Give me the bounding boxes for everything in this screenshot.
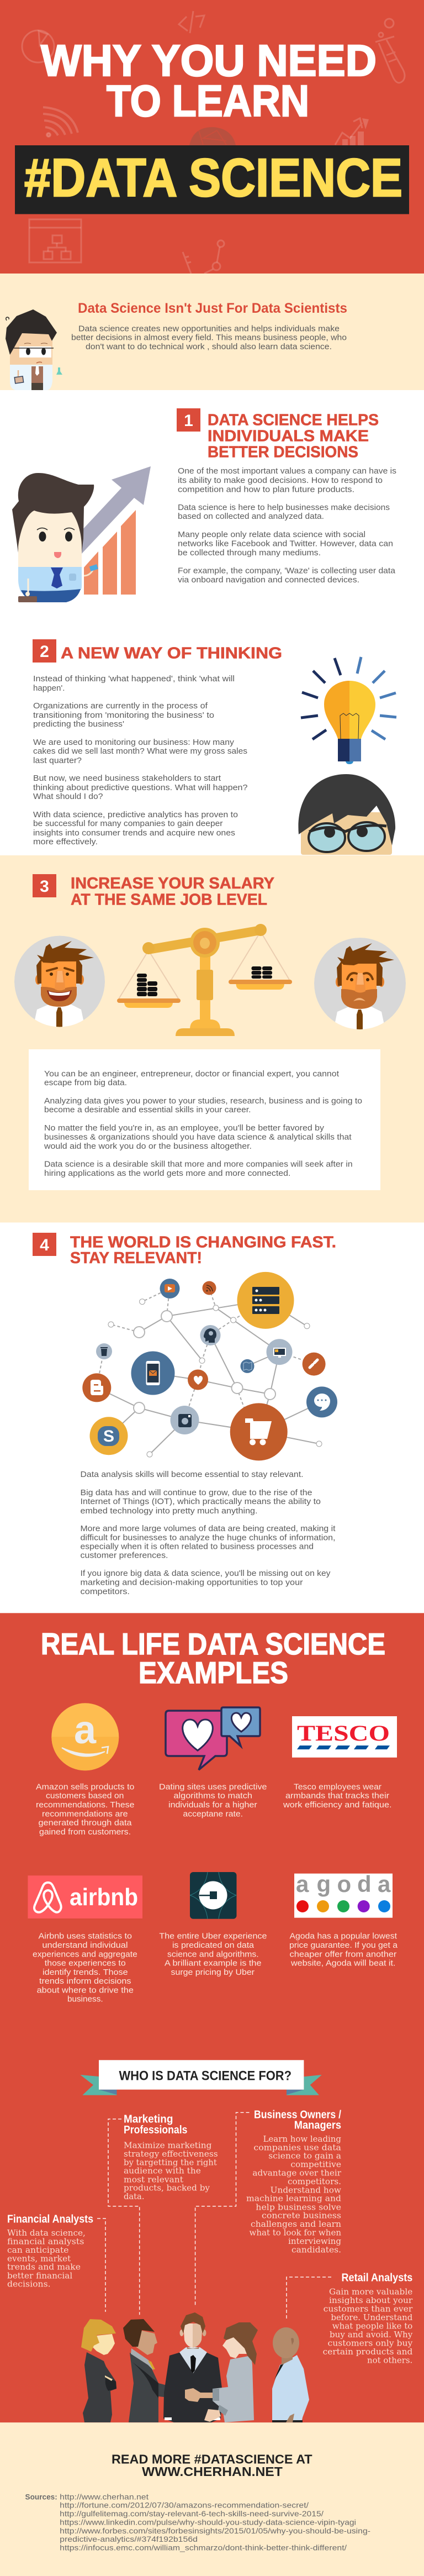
node: map bbox=[241, 1359, 254, 1373]
audience: financial analysts bbox=[7, 2214, 93, 2289]
panel: real life examples bbox=[0, 1613, 424, 2422]
illustration: balance scale with coins bbox=[117, 924, 292, 1036]
node: shopping cart bbox=[230, 1403, 288, 1460]
caption: tesco bbox=[283, 1782, 392, 1810]
logo: airbnb bbox=[28, 1875, 142, 1918]
heading: increase your salary: AT THE SAME JOB LEVEL bbox=[71, 891, 267, 909]
card: salary text: hiring applications as the world gets more and more connected. bbox=[44, 1169, 290, 1178]
number badge 2: 2 bbox=[40, 643, 49, 661]
heading: the world is changing fast: STAY RELEVANT! bbox=[70, 1249, 202, 1267]
intro text: don't want to do technical work , should also learn data science. bbox=[86, 342, 332, 351]
text block: new way of thinking: be successful for many companies to gain deeper bbox=[33, 819, 223, 828]
text block: stay relevant: difficult for businesses to analyze the huge chunks of information, bbox=[81, 1533, 336, 1543]
number badge 3: 3 bbox=[40, 877, 49, 896]
node: instagram bbox=[170, 1406, 199, 1434]
illustration: sad man bbox=[314, 938, 406, 1030]
caption: tesco: armbands that tracks their bbox=[285, 1791, 389, 1801]
heading: real life data science examples: REAL LIFE DATA SCIENCE bbox=[41, 1627, 385, 1661]
node: head with gear bbox=[200, 1325, 221, 1345]
caption: agoda: price guarantee. If you get a bbox=[289, 1941, 398, 1950]
audience: marketing professionals bbox=[124, 2114, 218, 2201]
icon: scientist character bbox=[6, 309, 62, 390]
heading: a new way of thinking: A NEW WAY OF THINKING bbox=[61, 645, 282, 663]
call to action: read more bbox=[112, 2452, 312, 2479]
intro text: better decisions in almost every field. This means business people, who bbox=[71, 333, 347, 343]
text block: new way of thinking: We are used to monitoring our business: How many bbox=[33, 738, 235, 747]
text block: better decisions: via onboard navigation and connected devices. bbox=[178, 575, 359, 585]
caption: dating sites: Dating sites uses predictive bbox=[159, 1782, 267, 1791]
audience: business owners and managers: Learn how leading bbox=[263, 2134, 341, 2144]
person: centre man bbox=[163, 2312, 222, 2422]
caption: uber: surge pricing by Uber bbox=[171, 1968, 255, 1977]
caption: airbnb: Airbnb uses statistics to bbox=[39, 1932, 132, 1941]
text block: better decisions: Data science is here to help businesses make decisions bbox=[178, 503, 390, 512]
audience: marketing professionals: products, backed by bbox=[124, 2183, 210, 2193]
logo: uber bbox=[190, 1872, 236, 1919]
audience: financial analysts: trends and make bbox=[7, 2262, 81, 2272]
text block: better decisions: be collected through many mediums. bbox=[178, 548, 321, 558]
node: play bbox=[160, 1279, 180, 1298]
audience: financial analysts: better financial bbox=[7, 2270, 72, 2280]
audience: business owners and managers: competitive bbox=[290, 2159, 341, 2169]
caption: uber: A brilliant example is the bbox=[165, 1958, 262, 1968]
icon: rising chart behind title box bbox=[342, 118, 369, 145]
caption: dating sites: acceptane rate. bbox=[183, 1809, 243, 1818]
text block: new way of thinking: more effectively. bbox=[33, 837, 98, 847]
logo: tesco: TESCO bbox=[297, 1721, 390, 1746]
panel: hero header bbox=[0, 0, 424, 274]
heading: real life data science examples bbox=[41, 1627, 385, 1690]
audience: marketing professionals: data. bbox=[124, 2191, 145, 2201]
caption: airbnb: identify trends. Those bbox=[43, 1968, 128, 1977]
audience: retail analysts: not others. bbox=[367, 2356, 412, 2365]
sources list: http://www.cherhan.net bbox=[60, 2492, 149, 2501]
text block: stay relevant: Internet of Things (IOT), which practically means the ability to bbox=[81, 1497, 321, 1506]
node: link bbox=[303, 1353, 326, 1376]
audience: marketing professionals: Professionals bbox=[124, 2124, 187, 2136]
caption: airbnb: business. bbox=[67, 1995, 103, 2004]
caption: airbnb bbox=[33, 1932, 137, 2004]
panel: intro bbox=[0, 274, 424, 390]
caption: agoda: cheaper offer from another bbox=[289, 1949, 396, 1959]
text block: stay relevant: Big data has and will continue to grow, due to the rise of the bbox=[81, 1488, 312, 1497]
dashed connector lines bbox=[97, 2112, 331, 2320]
text block: stay relevant: marketing and decision-making opportunities to top your bbox=[81, 1578, 303, 1587]
heading: real life data science examples: EXAMPLES bbox=[139, 1655, 288, 1690]
panel: section 4 bbox=[0, 1222, 424, 1613]
audience: financial analysts: financial analysts bbox=[7, 2236, 84, 2246]
audience: retail analysts: buy and avoid. Why bbox=[330, 2330, 413, 2340]
card: salary text: You can be an engineer, entrepreneur, doctor or financial expert, you cannot bbox=[44, 1069, 340, 1079]
caption: airbnb: about where to drive the bbox=[37, 1985, 134, 1995]
text block: new way of thinking: transitioning from 'monitoring the business' to bbox=[33, 711, 214, 720]
node: skype: S bbox=[103, 1427, 114, 1445]
card: salary text: Analyzing data gives you power to your studies, research, business and is going to bbox=[44, 1096, 362, 1106]
audience: business owners and managers: Managers bbox=[294, 2120, 341, 2132]
text block: stay relevant: embed technology into pretty much anything. bbox=[81, 1506, 257, 1516]
handshake bbox=[185, 2388, 213, 2402]
audience: retail analysts: certain products and bbox=[323, 2347, 413, 2357]
logo: agoda bbox=[294, 1871, 393, 1918]
caption: tesco: work efficiency and fatique. bbox=[283, 1800, 392, 1810]
audience: business owners and managers: candidates. bbox=[292, 2244, 341, 2254]
text block: better decisions: its ability to make good decisions. How to respond to bbox=[178, 476, 383, 485]
audience: retail analysts: customers than ever bbox=[324, 2304, 413, 2314]
text block: new way of thinking: cakes did we sell last month? What were my gross sales bbox=[33, 746, 247, 756]
caption: agoda: Agoda has a popular lowest bbox=[289, 1932, 398, 1941]
text block: better decisions bbox=[178, 466, 396, 585]
card: salary text: No matter the field you're in, as an employee, you'll be better favored by bbox=[44, 1123, 325, 1133]
heading: data science helps individuals make better decisions: BETTER DECISIONS bbox=[208, 444, 358, 461]
text block: new way of thinking: thinking about predictive questions. What will happen? bbox=[33, 783, 247, 792]
text block: new way of thinking: With data science, predictive analytics has proven to bbox=[33, 810, 238, 819]
caption: amazon: generated through data bbox=[39, 1818, 132, 1828]
audience: marketing professionals: most relevant bbox=[124, 2174, 183, 2184]
caption: agoda: website, Agoda will beat it. bbox=[290, 1958, 395, 1968]
panel: section 1 bbox=[0, 390, 424, 855]
title: why you need to learn: TO LEARN bbox=[107, 76, 309, 125]
caption: agoda bbox=[289, 1932, 398, 1968]
caption: airbnb: understand individual bbox=[42, 1941, 128, 1950]
illustration: businessman with rising bar chart bbox=[12, 466, 151, 602]
text block: stay relevant: Data analysis skills will become essential to stay relevant. bbox=[81, 1470, 304, 1479]
audience: retail analysts: customers only buy bbox=[328, 2338, 413, 2348]
title: why you need to learn: WHY YOU NEED bbox=[41, 36, 377, 85]
audience: business owners and managers: science to gain a bbox=[268, 2151, 341, 2161]
audience: retail analysts: Gain more valuable bbox=[329, 2287, 412, 2297]
audience: retail analysts: before. Understand bbox=[331, 2312, 413, 2322]
audience: financial analysts: events, market bbox=[7, 2253, 71, 2263]
person: brunette woman bbox=[204, 2322, 258, 2422]
illustration: business people shaking hands bbox=[81, 2312, 309, 2422]
node: skype bbox=[89, 1417, 128, 1455]
audience: business owners and managers: companies use data bbox=[253, 2142, 341, 2152]
caption: tesco: Tesco employees wear bbox=[294, 1782, 381, 1791]
audience: business owners and managers: what to look for when bbox=[250, 2227, 341, 2237]
caption: amazon: recommendations are bbox=[42, 1809, 128, 1818]
audience: business owners and managers: help business solve bbox=[256, 2202, 341, 2212]
icon: head with glasses bbox=[298, 774, 395, 855]
text block: new way of thinking: predicting the business' bbox=[33, 719, 124, 729]
sources list bbox=[25, 2492, 370, 2552]
caption: airbnb: experiences and aggregate bbox=[33, 1949, 137, 1959]
text block: new way of thinking: happen'. bbox=[33, 684, 65, 693]
node: chat bubble bbox=[306, 1386, 337, 1417]
text block: new way of thinking: Organizations are currently in the process of bbox=[33, 701, 208, 711]
caption: uber bbox=[159, 1932, 267, 1977]
caption: amazon bbox=[36, 1782, 134, 1837]
text block: better decisions: Many people only relate data science with social bbox=[178, 530, 365, 539]
audience: business owners and managers bbox=[246, 2109, 342, 2254]
caption: dating sites: algorithms to match bbox=[173, 1791, 252, 1801]
audience: marketing professionals: Maximize marketing bbox=[124, 2141, 212, 2151]
heading: the world is changing fast bbox=[70, 1234, 336, 1267]
audience: marketing professionals: audience with the bbox=[124, 2166, 201, 2176]
logo: tesco bbox=[292, 1716, 397, 1758]
card: salary text: businesses & organizations should you have data science & analytical skills that bbox=[44, 1133, 352, 1142]
audience: business owners and managers: Business Owners / bbox=[254, 2109, 341, 2121]
sources list: http://fortune.com/2012/07/30/amazons-recommendation-secret/ bbox=[60, 2500, 309, 2509]
caption: airbnb: those experiences to bbox=[45, 1958, 126, 1968]
caption: uber: science and algorithms. bbox=[167, 1949, 259, 1959]
icon: dating chat bubbles bbox=[166, 1707, 260, 1770]
text block: new way of thinking: But now, we need business stakeholders to start bbox=[33, 774, 221, 783]
logo: amazon bbox=[51, 1703, 119, 1770]
caption: uber: is predicated on data bbox=[172, 1941, 255, 1950]
caption: amazon: customers based on bbox=[46, 1791, 124, 1801]
heading: data science helps individuals make better decisions bbox=[208, 411, 379, 461]
caption: amazon: recommendations. These bbox=[36, 1800, 134, 1810]
audience: business owners and managers: Understand how bbox=[271, 2185, 341, 2195]
audience: business owners and managers: interviewing bbox=[288, 2236, 341, 2246]
text block: stay relevant: competitors. bbox=[81, 1587, 130, 1596]
card: salary text: escape from big data. bbox=[44, 1078, 127, 1087]
panel: section 2 bbox=[33, 639, 396, 855]
audience: business owners and managers: machine learning and bbox=[246, 2194, 341, 2204]
logo: airbnb: airbnb bbox=[70, 1884, 138, 1911]
audience: business owners and managers: advantage over their bbox=[252, 2168, 342, 2178]
audience: financial analysts: decisions. bbox=[7, 2279, 51, 2289]
caption: uber: The entire Uber experience bbox=[159, 1932, 267, 1941]
sources list: http://gulfelitemag.com/stay-relevant-6-tech-skills-need-survive-2015/ bbox=[60, 2509, 324, 2518]
heading: increase your salary bbox=[71, 875, 274, 909]
heading: increase your salary: INCREASE YOUR SALARY bbox=[71, 875, 274, 892]
number badge 4 bbox=[33, 1233, 56, 1256]
logo: amazon: a bbox=[74, 1708, 97, 1752]
text block: new way of thinking: Instead of thinking 'what happened', think 'what will bbox=[33, 674, 235, 684]
icon: globe behind title box bbox=[189, 127, 236, 145]
banner: who is data science for bbox=[80, 2060, 322, 2095]
icon: light bulb bbox=[301, 657, 396, 764]
audience: marketing professionals: by targetting the right bbox=[124, 2157, 217, 2167]
person: blonde woman bbox=[81, 2319, 116, 2422]
text block: better decisions: networks like Facebook and Twitter. However, data can bbox=[178, 539, 393, 549]
text block: new way of thinking: What should I do? bbox=[33, 792, 103, 801]
audience: financial analysts: Financial Analysts bbox=[7, 2214, 93, 2226]
text block: better decisions: competition and how to plan future products. bbox=[178, 485, 354, 495]
card: salary text: become a desirable and essential skills in your career. bbox=[44, 1105, 251, 1114]
caption: airbnb: trends inform decisions bbox=[39, 1976, 131, 1986]
audience: business owners and managers: concrete business bbox=[262, 2211, 341, 2221]
number badge 1: 1 bbox=[184, 412, 193, 430]
number badge 2 bbox=[33, 639, 56, 663]
text block: stay relevant: If you ignore big data & data science, you'll be missing out on key bbox=[81, 1569, 331, 1578]
number badge 3 bbox=[33, 874, 56, 897]
card: salary text bbox=[29, 1049, 380, 1190]
card: salary text: would aid the work you do or the business altogether. bbox=[44, 1142, 252, 1151]
audience: marketing professionals: strategy effectiveness bbox=[124, 2149, 218, 2159]
caption: amazon: Amazon sells products to bbox=[36, 1782, 134, 1791]
node: server bbox=[237, 1272, 294, 1329]
text block: new way of thinking: insights into consumer trends and acquire new ones bbox=[33, 828, 235, 838]
number badge 4: 4 bbox=[40, 1236, 49, 1254]
logo: agoda: agoda bbox=[296, 1871, 391, 1897]
person: dark-haired man bbox=[123, 2319, 185, 2422]
audience: retail analysts bbox=[323, 2272, 413, 2365]
sources list: predictive-analytics/#374f192b156d bbox=[60, 2535, 198, 2543]
panel: section 3 bbox=[0, 855, 424, 1222]
caption: dating sites bbox=[159, 1782, 267, 1818]
node: phone mail bbox=[131, 1352, 174, 1395]
text block: better decisions: One of the most important values a company can have is bbox=[178, 466, 396, 476]
background data-science icons bbox=[22, 11, 405, 274]
node: blogger bbox=[82, 1373, 111, 1402]
panel: footer bbox=[0, 2422, 424, 2576]
node: trash bbox=[96, 1343, 112, 1359]
audience: marketing professionals: Marketing bbox=[124, 2114, 173, 2126]
heading: the world is changing fast: THE WORLD IS CHANGING FAST. bbox=[70, 1234, 336, 1252]
title: why you need to learn bbox=[41, 36, 377, 125]
text block: stay relevant: especially when it is often related to business processes and bbox=[81, 1542, 314, 1552]
call to action: read more: READ MORE #DATASCIENCE AT bbox=[112, 2452, 312, 2466]
caption: amazon: gained from customers. bbox=[39, 1827, 131, 1837]
caption: dating sites: individuals for a higher bbox=[168, 1800, 257, 1810]
node: heart bbox=[188, 1369, 208, 1390]
number badge 1 bbox=[177, 408, 200, 432]
text block: stay relevant: customer preferences. bbox=[81, 1550, 168, 1560]
heading: data science isn't just for data scientists: Data Science Isn't Just For Data Scientists bbox=[78, 301, 347, 316]
audience: retail analysts: what people like to bbox=[332, 2321, 412, 2331]
audience: retail analysts: Retail Analysts bbox=[341, 2272, 412, 2284]
audience: business owners and managers: competitors. bbox=[288, 2177, 341, 2186]
card: salary text: Data science is a desirable skill that more and more companies will seek after in bbox=[44, 1159, 353, 1169]
text block: new way of thinking bbox=[33, 674, 247, 847]
illustration: happy man bbox=[14, 936, 105, 1028]
call to action: read more: WWW.CHERHAN.NET bbox=[142, 2464, 283, 2479]
banner: who is data science for: WHO IS DATA SCIENCE FOR? bbox=[119, 2068, 292, 2083]
sources list: Sources: bbox=[25, 2492, 57, 2501]
intro text bbox=[71, 324, 347, 351]
audience: financial analysts: can anticipate bbox=[7, 2245, 69, 2255]
sources list: https://www.linkedin.com/pulse/why-should-you-study-data-science-vipin-tyagi bbox=[60, 2517, 356, 2526]
text block: stay relevant bbox=[81, 1470, 336, 1596]
sources list: http://www.forbes.com/sites/forbesinsights/2015/01/05/why-you-should-be-using- bbox=[60, 2526, 370, 2535]
text block: better decisions: based on collected and analyzed data. bbox=[178, 512, 324, 521]
node: rss bbox=[202, 1281, 216, 1295]
person: bald man bbox=[272, 2327, 309, 2422]
sources list: https://infocus.emc.com/william_schmarzo/dont-think-better-think-different/ bbox=[60, 2543, 347, 2552]
heading: data science helps individuals make better decisions: INDIVIDUALS MAKE bbox=[208, 428, 369, 445]
audience: financial analysts: With data science, bbox=[7, 2228, 86, 2238]
heading: data science helps individuals make better decisions: DATA SCIENCE HELPS bbox=[208, 411, 379, 429]
network diagram bbox=[82, 1272, 337, 1460]
intro text: Data science creates new opportunities and helps individuals make bbox=[78, 324, 340, 334]
text block: new way of thinking: last quarter? bbox=[33, 756, 82, 765]
audience: business owners and managers: challenges and learn bbox=[251, 2219, 341, 2229]
audience: retail analysts: insights about your bbox=[329, 2295, 413, 2305]
text block: stay relevant: More and more large volumes of data are being created, making it bbox=[81, 1524, 336, 1533]
node: monitor bbox=[266, 1339, 293, 1365]
text block: better decisions: For example, the company, 'Waze' is collecting user data bbox=[178, 566, 396, 576]
